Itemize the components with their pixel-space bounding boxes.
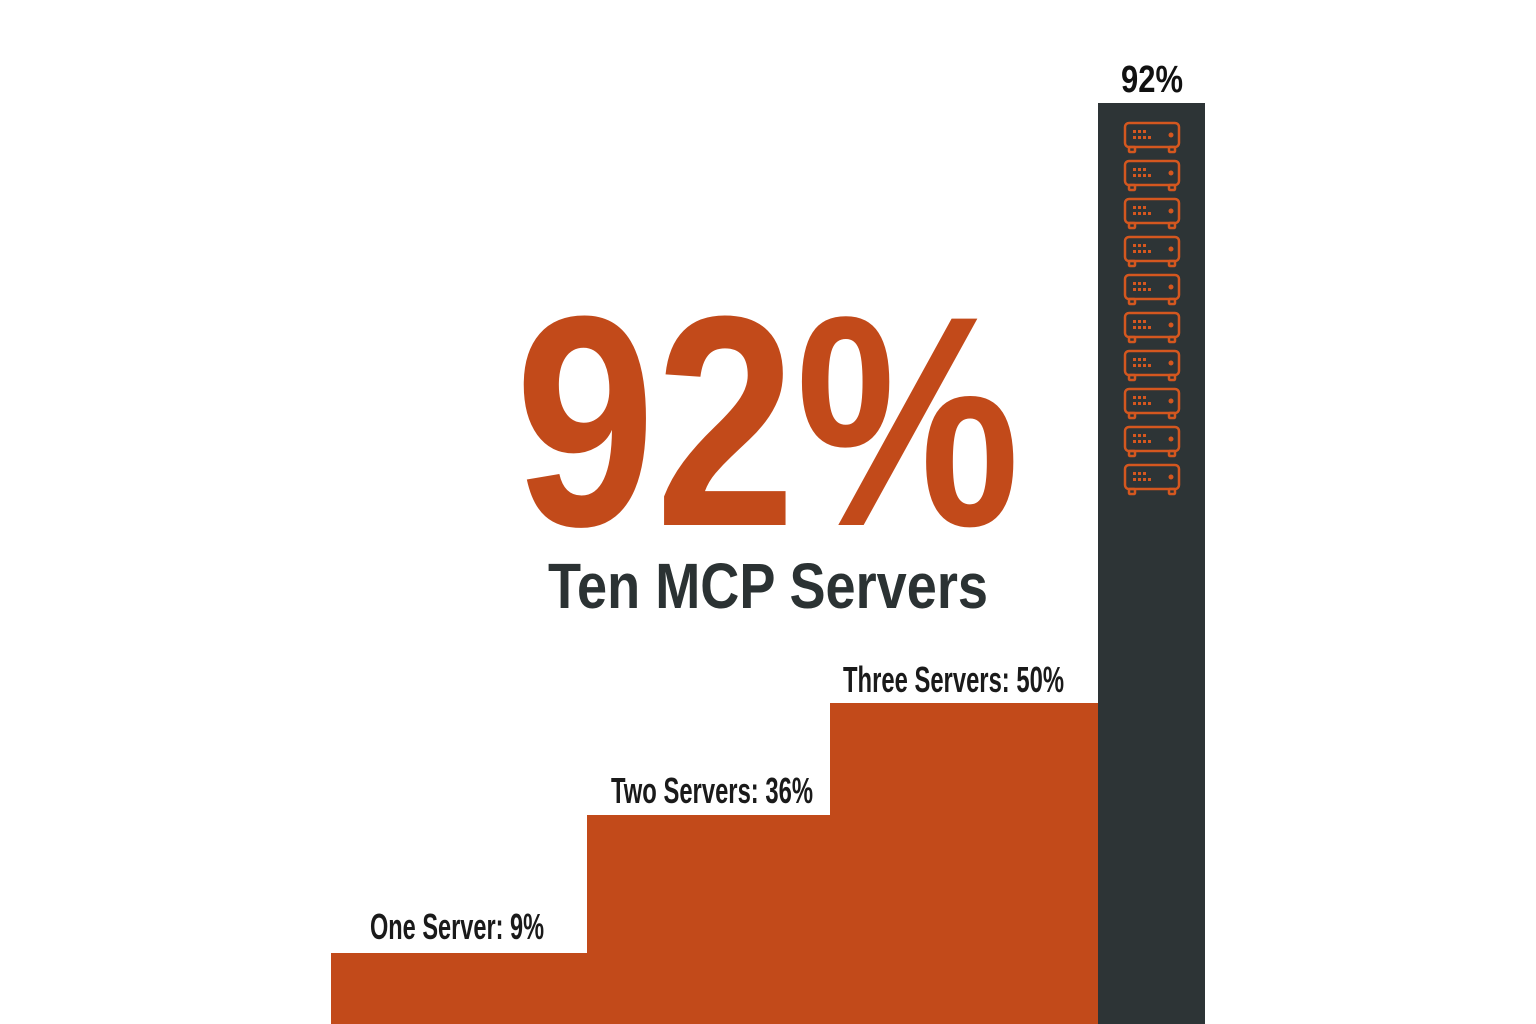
- big stat 92%: 92%: [515, 253, 1020, 589]
- step: one server: One Server: 9%: [370, 906, 544, 947]
- step: three servers: Three Servers: 50%: [843, 659, 1064, 700]
- step: two servers: [587, 770, 831, 1024]
- step: two servers: Two Servers: 36%: [611, 770, 813, 811]
- step: one server: [331, 906, 588, 1024]
- tower: ten servers 92%: [1098, 59, 1205, 1024]
- icon: server stack: [1125, 123, 1179, 494]
- step: three servers: [830, 659, 1099, 1024]
- tower: ten servers 92%: 92%: [1121, 59, 1183, 101]
- subtitle: Ten MCP Servers: [548, 550, 988, 622]
